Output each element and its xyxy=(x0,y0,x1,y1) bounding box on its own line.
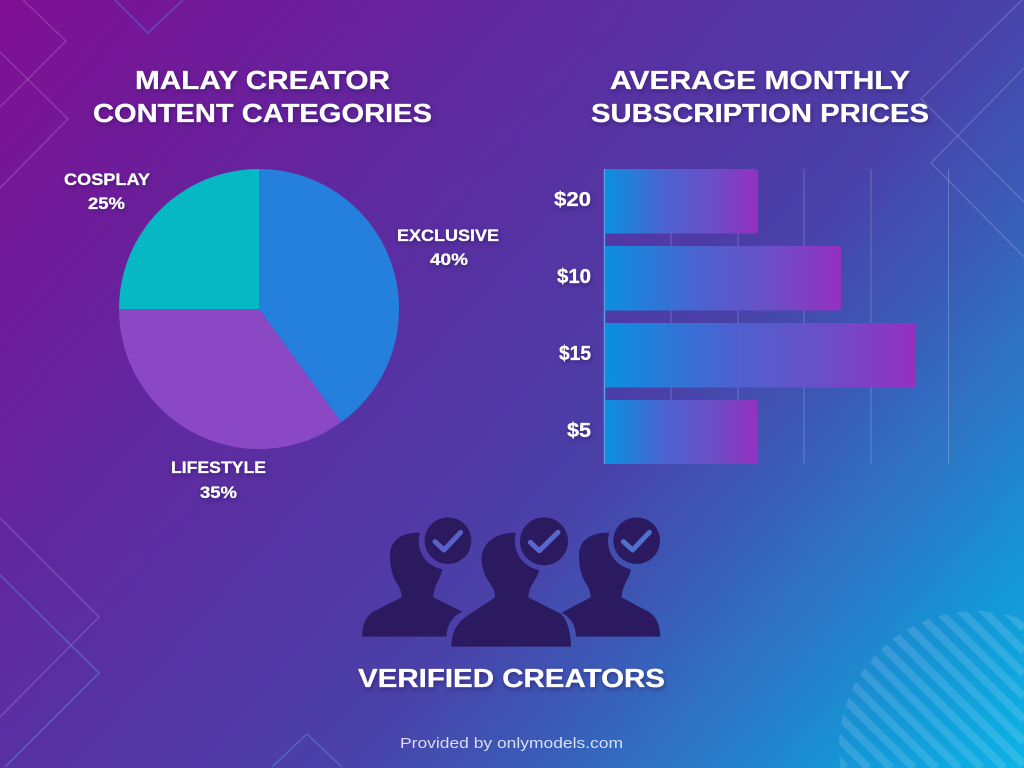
slice: cosplay 25% xyxy=(119,169,259,309)
label: exclusive: EXCLUSIVE xyxy=(397,226,499,245)
axis labels: $15 xyxy=(559,343,591,365)
icon: verified creators group xyxy=(362,517,660,647)
bar: $5 xyxy=(605,400,758,464)
bar: $20 xyxy=(605,169,758,234)
label: lifestyle: 35% xyxy=(200,483,237,502)
label: cosplay: 25% xyxy=(88,194,125,213)
title: subscription prices: AVERAGE MONTHLY xyxy=(610,65,910,95)
slice: exclusive 40% xyxy=(259,169,399,422)
title: content categories: CONTENT CATEGORIES xyxy=(93,98,432,128)
pie chart: content categories xyxy=(119,169,399,449)
title: content categories: MALAY CREATOR xyxy=(135,65,390,95)
person: left xyxy=(362,533,462,637)
title: subscription prices xyxy=(591,65,929,128)
label: exclusive xyxy=(397,226,499,269)
bar: $10 xyxy=(605,246,841,310)
axis labels: $20 xyxy=(554,189,591,211)
heading: verified creators: VERIFIED CREATORS xyxy=(358,663,665,693)
title: content categories xyxy=(93,65,432,128)
label: exclusive: 40% xyxy=(430,250,468,269)
label: cosplay: COSPLAY xyxy=(64,170,151,189)
axis labels: $10 xyxy=(557,266,591,288)
axis labels xyxy=(554,189,591,442)
label: cosplay xyxy=(64,170,151,213)
label: lifestyle xyxy=(171,458,266,502)
bar chart: subscription prices xyxy=(554,169,948,464)
person: right xyxy=(562,533,660,637)
badge: centre check xyxy=(520,517,568,565)
axis labels: $5 xyxy=(567,420,591,442)
person: centre xyxy=(451,533,571,647)
bar: $15 xyxy=(605,323,916,388)
badge: right check xyxy=(613,517,660,564)
label: lifestyle: LIFESTYLE xyxy=(171,458,266,477)
title: subscription prices: SUBSCRIPTION PRICES xyxy=(591,98,929,128)
slice: lifestyle 35% xyxy=(119,309,341,449)
badge: left check xyxy=(425,517,471,564)
footer credit: Provided by onlymodels.com xyxy=(400,735,623,752)
